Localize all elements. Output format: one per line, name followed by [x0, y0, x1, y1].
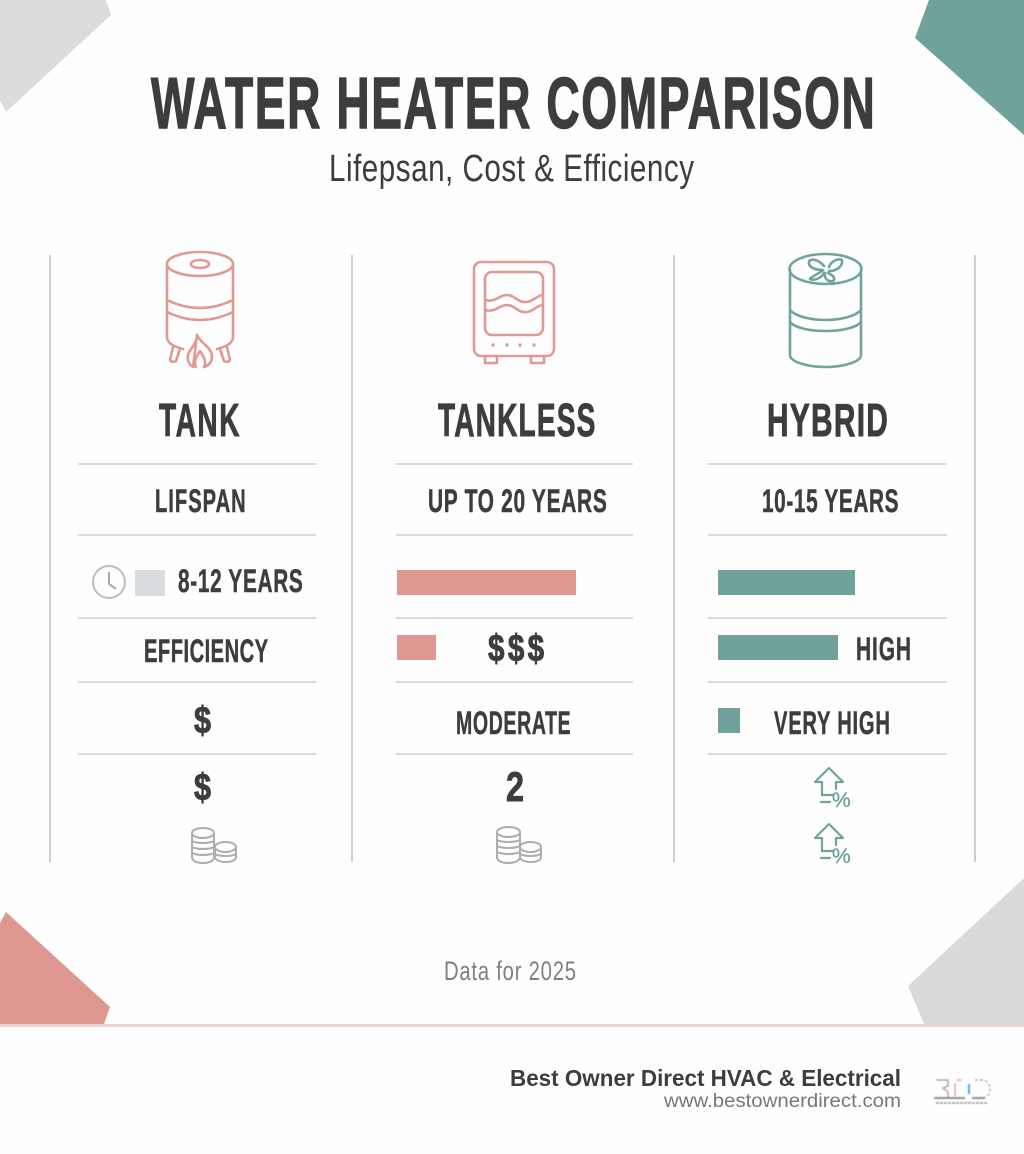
tankless lifespan: UP TO 20 YEARS: [428, 484, 607, 519]
tankless cost bar: [397, 635, 436, 660]
tank cost one: $: [194, 700, 211, 742]
icon: coins tank: [192, 828, 236, 863]
icon: percent arrow one: %: [832, 789, 851, 812]
icon: percent arrow one: [815, 768, 851, 812]
hybrid lifespan bar: [718, 570, 855, 595]
footer website: www.bestownerdirect.com: [663, 1091, 901, 1112]
corner shape: top right: [915, 0, 1024, 135]
icon: clock: [93, 566, 125, 598]
icon: percent arrow two: %: [832, 845, 851, 868]
corner shape: bottom left: [0, 912, 110, 1024]
logo: [934, 1080, 990, 1103]
heading: tankless: TANKLESS: [438, 396, 595, 447]
corner shape: bottom right: [908, 878, 1024, 1024]
hybrid rating: VERY HIGH: [774, 705, 890, 741]
heading: tank: TANK: [159, 396, 240, 447]
title: WATER HEATER COMPARISON: [151, 62, 875, 143]
hybrid efficiency swatch: [718, 708, 740, 733]
tankless lifespan bar: [397, 570, 576, 595]
subtitle: Lifepsan, Cost & Efficiency: [329, 148, 694, 190]
hybrid efficiency bar: [718, 635, 838, 660]
icon: tank heater: [167, 252, 233, 367]
tank lifespan swatch: [135, 570, 165, 596]
icon: coins tankless: [497, 827, 541, 863]
hybrid efficiency value: HIGH: [856, 632, 911, 667]
corner shape: top left: [0, 0, 111, 112]
hybrid lifespan: 10-15 YEARS: [762, 484, 899, 519]
tank lifespan value: 8-12 YEARS: [178, 564, 303, 599]
heading: hybrid: HYBRID: [767, 396, 888, 447]
icon: hybrid heater: [790, 254, 862, 367]
tankless cost: $$$: [488, 628, 544, 670]
footer company name: Best Owner Direct HVAC & Electrical: [510, 1065, 901, 1091]
data year note: Data for 2025: [444, 956, 576, 987]
tank efficiency label: EFFICIENCY: [144, 633, 268, 669]
icon: percent arrow two: [815, 824, 851, 868]
tank lifespan label: LIFSPAN: [155, 483, 246, 519]
footer divider: [0, 1024, 1024, 1027]
tank cost two: $: [194, 767, 211, 809]
icon: tankless heater: [474, 262, 554, 363]
tankless efficiency: MODERATE: [456, 705, 571, 741]
tankless number: 2: [506, 763, 524, 810]
